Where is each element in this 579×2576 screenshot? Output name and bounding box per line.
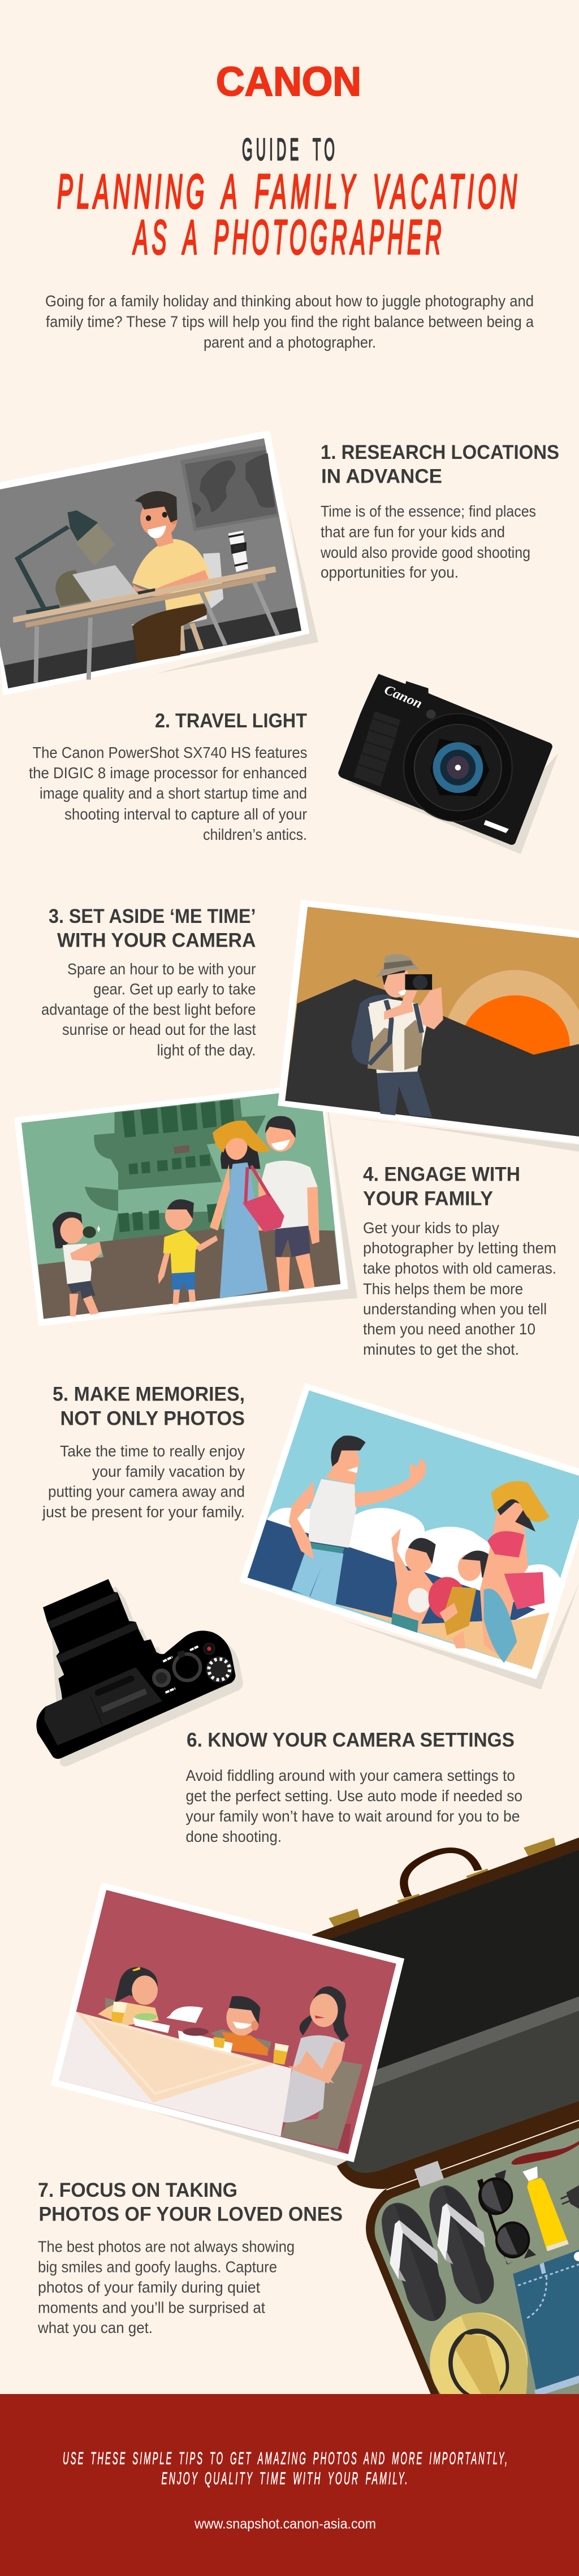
sunglasses (477, 2170, 536, 2265)
tip 4 heading: YOUR FAMILY (363, 1188, 493, 1209)
intro text: family time? These 7 tips will help you find the right balance between being a (46, 313, 534, 330)
mum at table (280, 1987, 349, 2123)
tip 7 text (37, 2179, 343, 2336)
tip 4 body: photographer by letting them (363, 1239, 556, 1257)
icon: compact camera top view (36, 1579, 243, 1766)
denim shorts (513, 2250, 579, 2397)
tip 7 heading (38, 2179, 343, 2226)
photo 5: family at the beach (239, 1383, 579, 1689)
boy (391, 1528, 438, 1633)
tip 4 body: This helps them be more (363, 1280, 523, 1298)
flip-flop left (382, 2202, 446, 2321)
footer panel (0, 2394, 579, 2576)
tip 5 body: putting your camera away and (48, 1483, 245, 1500)
flip-flop right (429, 2185, 494, 2304)
girl at table (98, 1967, 159, 2026)
photo 3: photographer at sunset (278, 900, 579, 1152)
tip 4 heading (363, 1163, 520, 1209)
tip 7 heading: 7. FOCUS ON TAKING (38, 2179, 237, 2201)
tip 5 heading (53, 1384, 245, 1430)
tip 3 body (41, 960, 256, 1059)
logo: Canon wordmark: CANON (216, 59, 361, 105)
tip 7 body: what you can get. (37, 2319, 153, 2336)
title (57, 132, 521, 264)
tip 2 body (29, 744, 308, 843)
photo 7: family dinner (50, 1882, 404, 2166)
tip 3 text (41, 905, 256, 1059)
tip 1 body (320, 502, 536, 581)
belt in suitcase (512, 2141, 579, 2165)
tip 1 body: opportunities for you. (321, 563, 459, 581)
tip 3 heading: 3. SET ASIDE ‘ME TIME’ (49, 905, 256, 927)
tip 2 body: children’s antics. (203, 826, 307, 843)
tip 3 body: sunrise or head out for the last (62, 1021, 256, 1038)
tip 1 heading: IN ADVANCE (321, 466, 442, 487)
tip 4 body: them you need another 10 (363, 1320, 535, 1338)
tip 5 heading: NOT ONLY PHOTOS (60, 1407, 245, 1430)
camera brand mark: Canon (382, 683, 424, 712)
tip 3 body: light of the day. (157, 1041, 256, 1059)
intro text (45, 292, 534, 351)
mum (210, 1121, 284, 1299)
tip 4 text (363, 1163, 556, 1358)
closing message (63, 2448, 509, 2488)
dad (289, 1436, 426, 1606)
tip 2 body: image quality and a short startup time and (40, 784, 307, 802)
tip 7 body (37, 2238, 295, 2336)
tip 4 body: Get your kids to play (363, 1219, 499, 1237)
tip 2 body: the DIGIC 8 image processor for enhanced (29, 764, 307, 782)
tablecloth (59, 2011, 292, 2136)
tip 6 body: Avoid fiddling around with your camera settings to (185, 1767, 515, 1784)
tip 7 body: big smiles and goofy laughs. Capture (38, 2258, 277, 2275)
tip 4 body: minutes to get the shot. (363, 1341, 519, 1358)
intro text: parent and a photographer. (204, 333, 376, 351)
tip 6 body (185, 1767, 522, 1845)
website url: www.snapshot.canon-asia.com (194, 2516, 376, 2532)
title: GUIDE TO (242, 132, 338, 167)
icon: compact camera front (338, 674, 558, 854)
tip 5 body: Take the time to really enjoy (60, 1442, 245, 1460)
swim ring (429, 1577, 465, 1619)
tip 2 text (29, 710, 308, 843)
suitcase lid (312, 1837, 579, 2189)
tip 5 body: your family vacation by (92, 1463, 245, 1480)
tip 4 body: understanding when you tell (363, 1300, 547, 1318)
chair (280, 2058, 362, 2149)
tip 2 body: shooting interval to capture all of your (64, 805, 307, 823)
girl with camera (53, 1212, 102, 1316)
tip 7 body: photos of your family during quiet (38, 2279, 260, 2296)
suitcase base with packed items (366, 2114, 579, 2412)
tip 3 body: gear. Get up early to take (93, 980, 256, 998)
tip 3 heading (49, 905, 256, 952)
tip 1 heading (321, 441, 559, 487)
tip 3 heading: WITH YOUR CAMERA (57, 929, 256, 952)
tip 6 heading: 6. KNOW YOUR CAMERA SETTINGS (187, 1729, 515, 1751)
tip 6 text (185, 1729, 522, 1845)
latch (414, 2161, 444, 2187)
tip 7 heading: PHOTOS OF YOUR LOVED ONES (38, 2203, 343, 2226)
tip 7 body: moments and you’ll be surprised at (38, 2299, 265, 2316)
tip 1 text (320, 441, 559, 581)
tip 3 body: advantage of the best light before (41, 1000, 256, 1018)
plug (561, 2186, 579, 2208)
tip 5 heading: 5. MAKE MEMORIES, (53, 1384, 245, 1405)
tip 2 heading: 2. TRAVEL LIGHT (155, 710, 307, 732)
mum (480, 1481, 550, 1663)
tip 4 body (363, 1219, 556, 1358)
tip 6 body: your family won’t have to wait around for you to be (185, 1807, 520, 1825)
tip 1 heading: 1. RESEARCH LOCATIONS (321, 441, 559, 463)
tip 5 body: just be present for your family. (42, 1503, 245, 1520)
straw hat (430, 2313, 528, 2412)
tip 2 body: The Canon PowerShot SX740 HS features (33, 744, 308, 761)
tip 1 body: Time is of the essence; find places (321, 502, 536, 520)
tip 5 text (42, 1384, 245, 1520)
tip 5 body (42, 1442, 245, 1520)
girl (439, 1551, 493, 1649)
tip 4 heading: 4. ENGAGE WITH (363, 1163, 520, 1186)
boy at table (210, 1996, 271, 2055)
tip 1 body: would also provide good shooting (320, 544, 530, 561)
photo 4: family at temple (14, 1083, 357, 1326)
dishes (111, 2001, 289, 2065)
tip 7 body: The best photos are not always showing (38, 2238, 295, 2255)
tip 4 body: take photos with old cameras. (363, 1259, 556, 1277)
boy (158, 1199, 218, 1304)
tip 6 body: get the perfect setting. Use auto mode if needed so (185, 1787, 522, 1805)
tip 1 body: that are fun for your kids and (321, 523, 505, 540)
photo 1: man researching at desk (0, 430, 318, 696)
intro text: Going for a family holiday and thinking about how to juggle photography and (45, 292, 534, 310)
tip 6 body: done shooting. (185, 1828, 282, 1845)
tip 3 body: Spare an hour to be with your (67, 960, 256, 978)
dad (258, 1116, 319, 1291)
photographer (352, 954, 443, 1117)
sunscreen tube (522, 2166, 569, 2251)
